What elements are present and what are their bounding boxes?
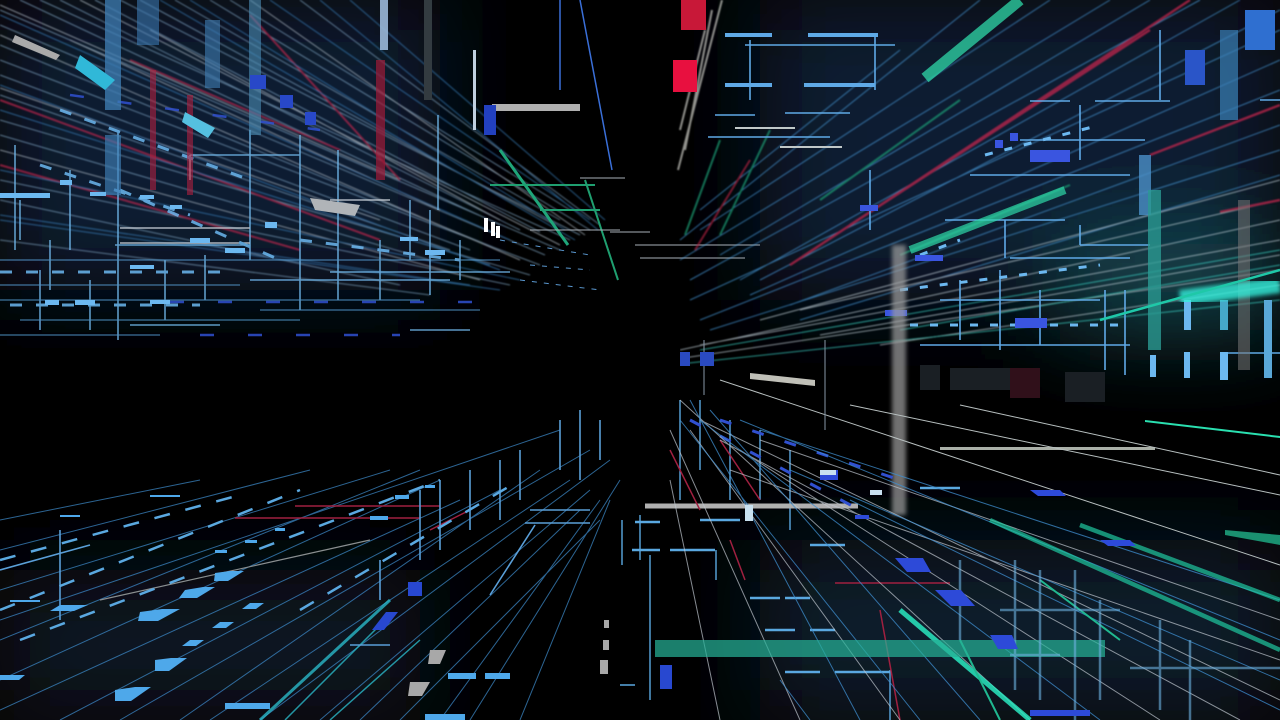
grid structures: upper left <box>0 95 510 357</box>
teal horizontal beam: lower right <box>655 640 1105 657</box>
bright vertical bars: upper left <box>12 0 580 216</box>
perspective streaks: lower right <box>670 400 1280 720</box>
black central void <box>0 290 680 460</box>
vertical bars: upper right <box>860 10 1275 380</box>
lower centre grid <box>620 400 960 720</box>
red blocks: top centre right <box>673 0 706 92</box>
grid structures: lower right <box>745 470 1280 720</box>
green streaks: upper centre <box>490 0 760 290</box>
data blocks: upper left <box>0 180 500 305</box>
teal streaks: top and right <box>910 0 1280 320</box>
middle right lines and panels <box>680 340 1280 565</box>
glowing vertical white beam <box>892 245 906 515</box>
perspective streaks: lower left <box>0 410 620 720</box>
perspective streaks: upper left <box>0 0 605 295</box>
data blocks: lower left <box>0 485 672 720</box>
perspective streaks: upper right <box>670 0 1280 365</box>
grid structures: upper right <box>708 30 1280 375</box>
